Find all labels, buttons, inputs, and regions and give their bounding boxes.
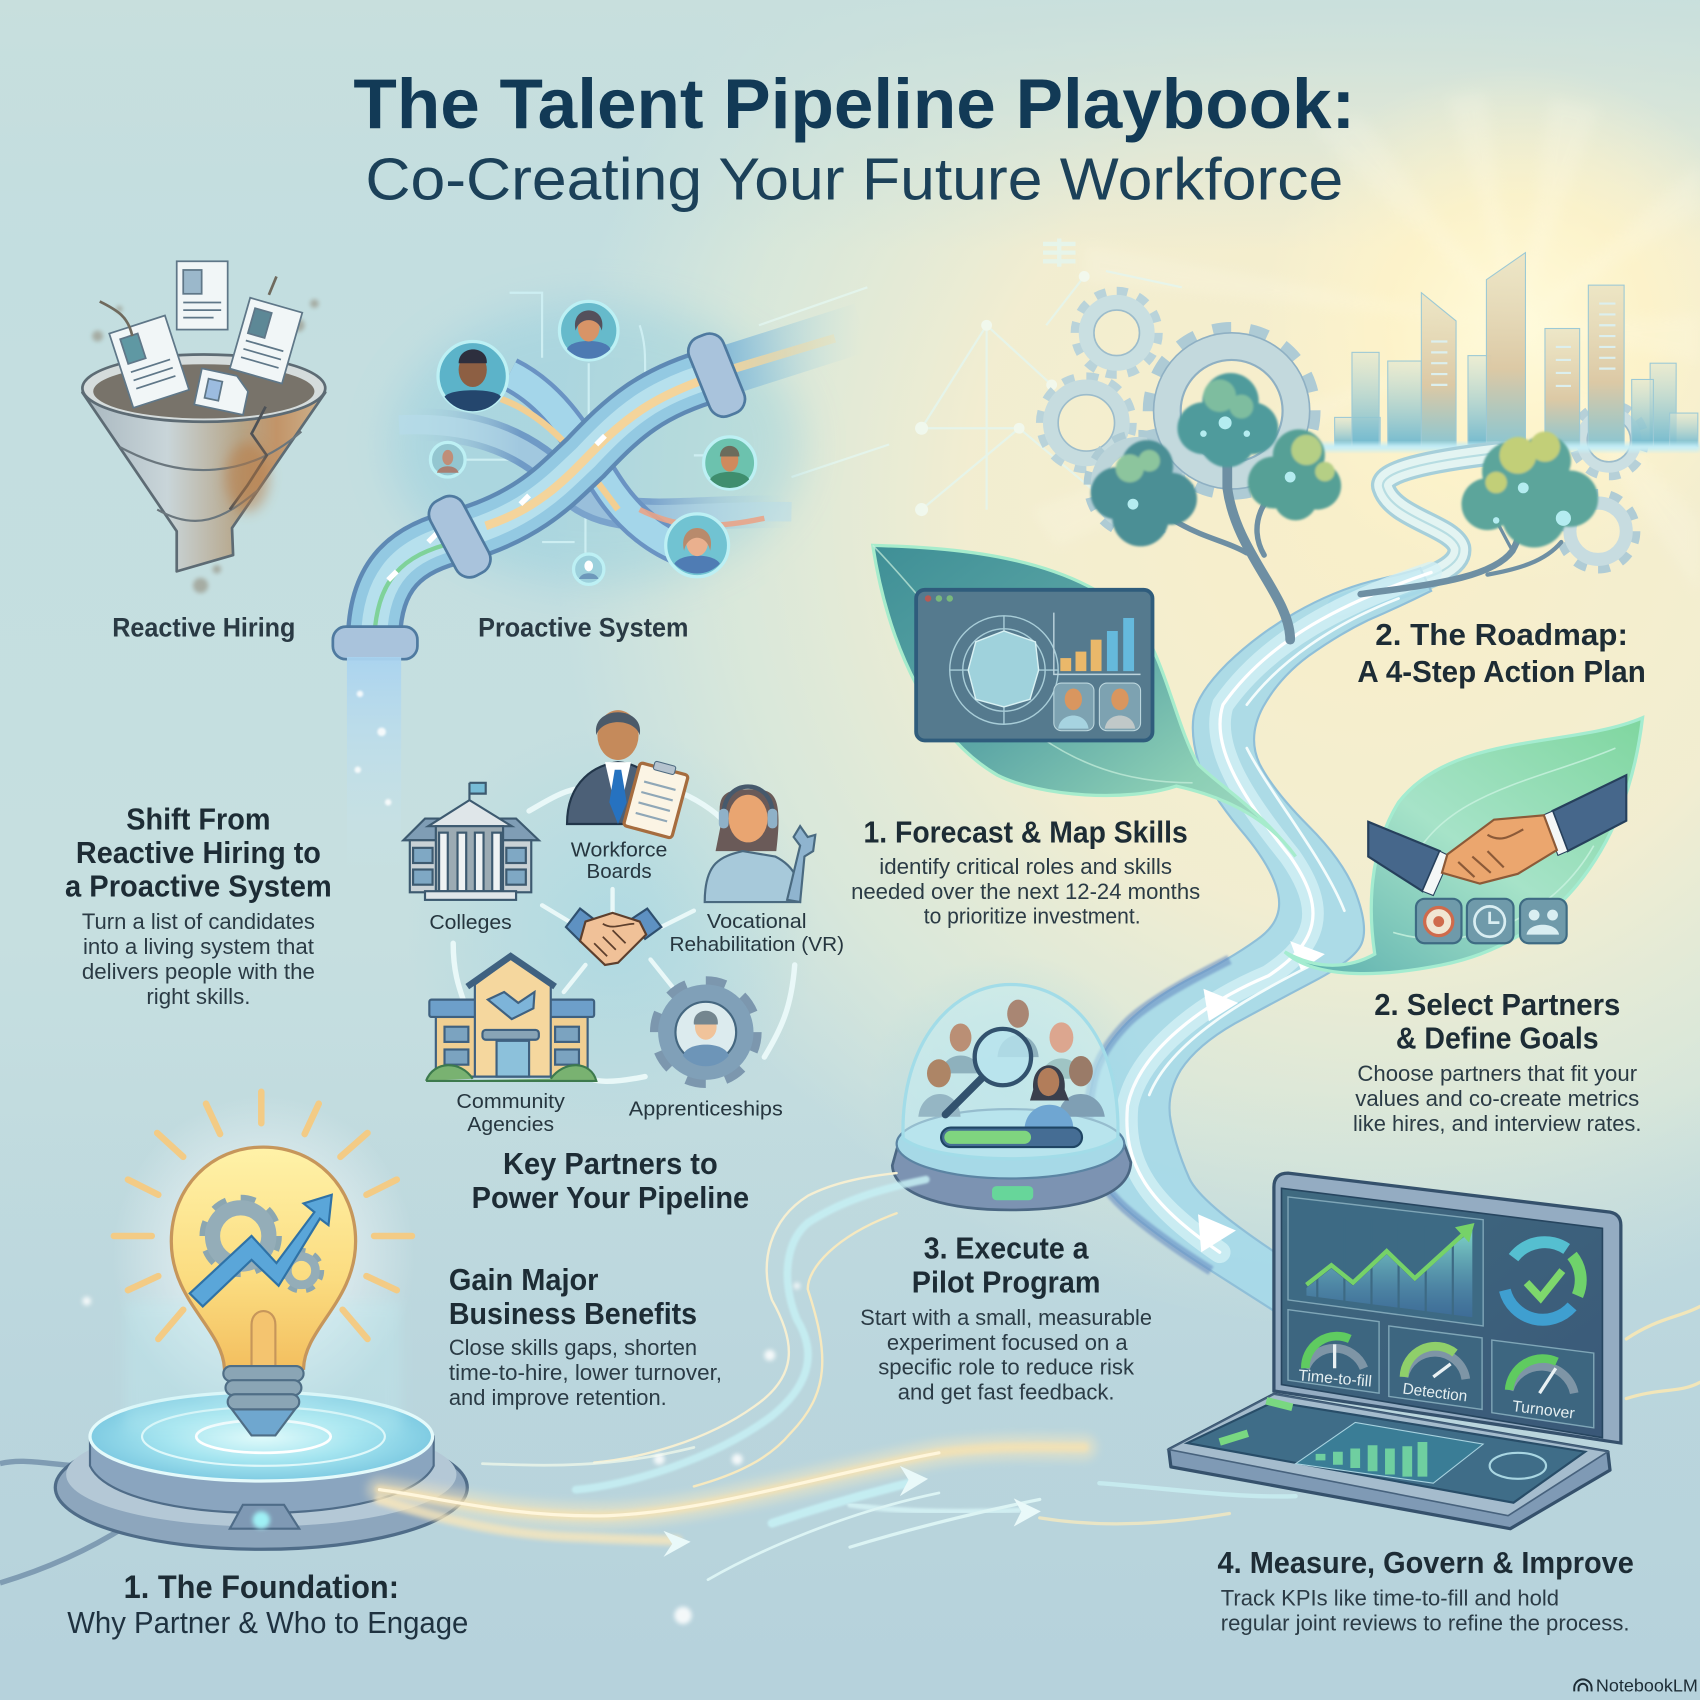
water falling from pipe: [347, 657, 401, 874]
label: workforce boards: Boards: [587, 860, 652, 883]
dome base: [892, 1138, 1131, 1210]
heading: the roadmap: [1357, 619, 1646, 689]
bulb screw base: [223, 1366, 304, 1435]
text block: select partners: & Define Goals: [1396, 1022, 1599, 1055]
cycle check icon: [1505, 1242, 1581, 1320]
text block: shift from reactive: Shift From: [126, 803, 271, 836]
portrait tiles: [1054, 683, 1141, 731]
horizon glow: [1312, 443, 1700, 451]
text block: measure govern improve: regular joint reviews to refine the process.: [1221, 1611, 1630, 1636]
text block: business benefits: and improve retention.: [449, 1385, 667, 1410]
text block: forecast and map skills: [851, 816, 1200, 929]
title: Co-Creating Your Future Workforce: [365, 145, 1343, 212]
flowing light streams: [379, 1173, 1700, 1580]
text block: shift from reactive: delivers people with the: [82, 959, 315, 984]
bulb gears: [204, 1199, 321, 1290]
upper winding road: [1339, 453, 1496, 607]
heading: the foundation: 1. The Foundation:: [124, 1569, 399, 1605]
text block: forecast and map skills: 1. Forecast & Map Skills: [864, 816, 1188, 849]
people avatars: [430, 301, 756, 584]
main pipe: [374, 327, 862, 642]
labels: funnel and pipeline: Proactive System: [478, 611, 688, 642]
gauge labels: Detection: [1402, 1381, 1468, 1405]
label: community agencies: [456, 1090, 566, 1136]
heading: key partners: Key Partners to: [503, 1148, 718, 1181]
text block: shift from reactive: right skills.: [146, 984, 250, 1009]
heading: the foundation: Why Partner & Who to Engage: [67, 1607, 468, 1640]
sparkles: [82, 1283, 800, 1624]
tree trunks: [1136, 439, 1561, 640]
gauge labels: Turnover: [1511, 1398, 1576, 1423]
back pipes: [399, 374, 791, 553]
glass dome: [903, 984, 1118, 1159]
heading: the roadmap: 2. The Roadmap:: [1375, 619, 1628, 652]
text block: forecast and map skills: to prioritize investment.: [924, 904, 1141, 929]
icon: community agency building: [426, 956, 596, 1081]
text block: measure govern improve: [1218, 1547, 1634, 1636]
text block: shift from reactive: into a living system that: [83, 934, 315, 959]
laptop base: [1169, 1394, 1610, 1529]
team of people: [918, 1000, 1105, 1128]
winding roadmap river: [1089, 568, 1431, 1328]
text block: select partners: like hires, and interview rates.: [1353, 1111, 1641, 1136]
heading: key partners: [472, 1148, 749, 1215]
label: community agencies: Community: [456, 1090, 566, 1113]
icon: growth trees: [1091, 373, 1598, 640]
text block: business benefits: time-to-hire, lower turnover,: [449, 1360, 722, 1385]
river direction arrows: [1198, 941, 1325, 1252]
pipe flanges: [333, 329, 750, 659]
resume documents: [109, 261, 302, 415]
icon: twisted proactive pipeline: [333, 293, 862, 874]
bulb glow: [112, 1095, 415, 1420]
icon: apprenticeship gear: [656, 982, 756, 1082]
label: vocational rehabilitation: [669, 910, 844, 956]
light rays: [114, 1092, 412, 1339]
text block: business benefits: Gain Major: [449, 1264, 599, 1297]
text block: business benefits: Close skills gaps, shorten: [449, 1335, 697, 1360]
icon: handshake: [1368, 775, 1626, 896]
text block: execute a pilot: experiment focused on a: [887, 1330, 1128, 1355]
text block: select partners: values and co-create metrics: [1355, 1086, 1639, 1111]
icon: KPI laptop dashboard: [1169, 1173, 1621, 1529]
text block: measure govern improve: 4. Measure, Govern & Improve: [1218, 1547, 1634, 1580]
bar chart: [1054, 613, 1141, 674]
text block: forecast and map skills: needed over the next 12-24 months: [851, 879, 1200, 904]
line chart panel: [1288, 1197, 1483, 1326]
text block: select partners: Choose partners that fit your: [1357, 1061, 1638, 1086]
labels: funnel and pipeline: Reactive Hiring: [112, 611, 295, 642]
label: workforce boards: [571, 839, 667, 883]
text block: execute a pilot: specific role to reduce risk: [878, 1355, 1135, 1380]
text block: measure govern improve: Track KPIs like time-to-fill and hold: [1221, 1586, 1559, 1611]
background gears: [1041, 292, 1645, 569]
bulb glass: [171, 1147, 356, 1368]
heading: the foundation: [67, 1569, 468, 1640]
text block: execute a pilot: and get fast feedback.: [898, 1380, 1115, 1405]
text block: select partners: 2. Select Partners: [1374, 989, 1620, 1022]
magnifier: [945, 1029, 1031, 1115]
dashboard panel: [916, 590, 1152, 740]
pipeline glow: [390, 304, 802, 585]
icon: vocational rehabilitation person: [705, 787, 815, 902]
label: community agencies: Agencies: [467, 1113, 554, 1136]
text block: select partners: [1353, 989, 1641, 1136]
icon: glowing idea bulb: [112, 1092, 415, 1435]
hologram beams: [125, 1301, 401, 1431]
tree foliage: [1091, 373, 1598, 548]
text block: execute a pilot: Pilot Program: [912, 1266, 1100, 1299]
text block: shift from reactive: Reactive Hiring to: [76, 837, 321, 870]
radar chart: [950, 616, 1058, 724]
laptop screen: [1274, 1173, 1621, 1443]
title: [353, 64, 1355, 212]
leaf: forecast dashboard: [873, 545, 1296, 857]
text block: shift from reactive: [65, 803, 332, 1009]
icon tiles: target, clock, people: [1416, 899, 1567, 943]
gauge labels: Time-to-fill: [1298, 1367, 1372, 1391]
title: The Talent Pipeline Playbook:: [353, 64, 1355, 143]
icon: glowing platform: [0, 1392, 467, 1583]
watermark: NotebookLM: NotebookLM: [1596, 1675, 1698, 1695]
text block: execute a pilot: [860, 1233, 1152, 1405]
icon: pilot program dome: [870, 954, 1151, 1214]
funnel rust and dust: [92, 299, 319, 593]
gauge panels: [1288, 1310, 1594, 1428]
heading: key partners: Power Your Pipeline: [472, 1182, 749, 1215]
text block: shift from reactive: a Proactive System: [65, 871, 332, 904]
leaf: handshake partners: [1285, 718, 1643, 974]
icon: workforce board person: [567, 710, 690, 838]
progress bar: [941, 1128, 1082, 1147]
text block: execute a pilot: Start with a small, measurable: [860, 1305, 1152, 1330]
icon: city skyline: [1335, 253, 1698, 447]
icon: college building: [403, 783, 539, 900]
label: vocational rehabilitation: Vocational: [707, 910, 807, 933]
text block: shift from reactive: Turn a list of candidates: [82, 909, 315, 934]
text block: business benefits: [449, 1264, 722, 1410]
icon: central handshake: [566, 909, 661, 965]
label: apprenticeships: Apprenticeships: [629, 1098, 783, 1121]
background network: faint data lines: [759, 239, 1182, 516]
label: workforce boards: Workforce: [571, 839, 667, 862]
labels: funnel and pipeline: [112, 611, 688, 642]
rising arrow: [190, 1195, 332, 1306]
stream arrows: [664, 1466, 1041, 1557]
gauge labels: [1298, 1367, 1576, 1423]
text block: forecast and map skills: identify critical roles and skills: [879, 854, 1172, 879]
partner network ring: [407, 726, 819, 1138]
label: colleges: Colleges: [429, 911, 512, 934]
label: vocational rehabilitation: Rehabilitation (VR): [669, 933, 844, 956]
heading: the roadmap: A 4-Step Action Plan: [1357, 656, 1646, 689]
text block: business benefits: Business Benefits: [449, 1298, 697, 1331]
icon: broken funnel with resumes: [82, 261, 325, 593]
text block: execute a pilot: 3. Execute a: [924, 1233, 1090, 1266]
connector lines: [465, 293, 748, 553]
